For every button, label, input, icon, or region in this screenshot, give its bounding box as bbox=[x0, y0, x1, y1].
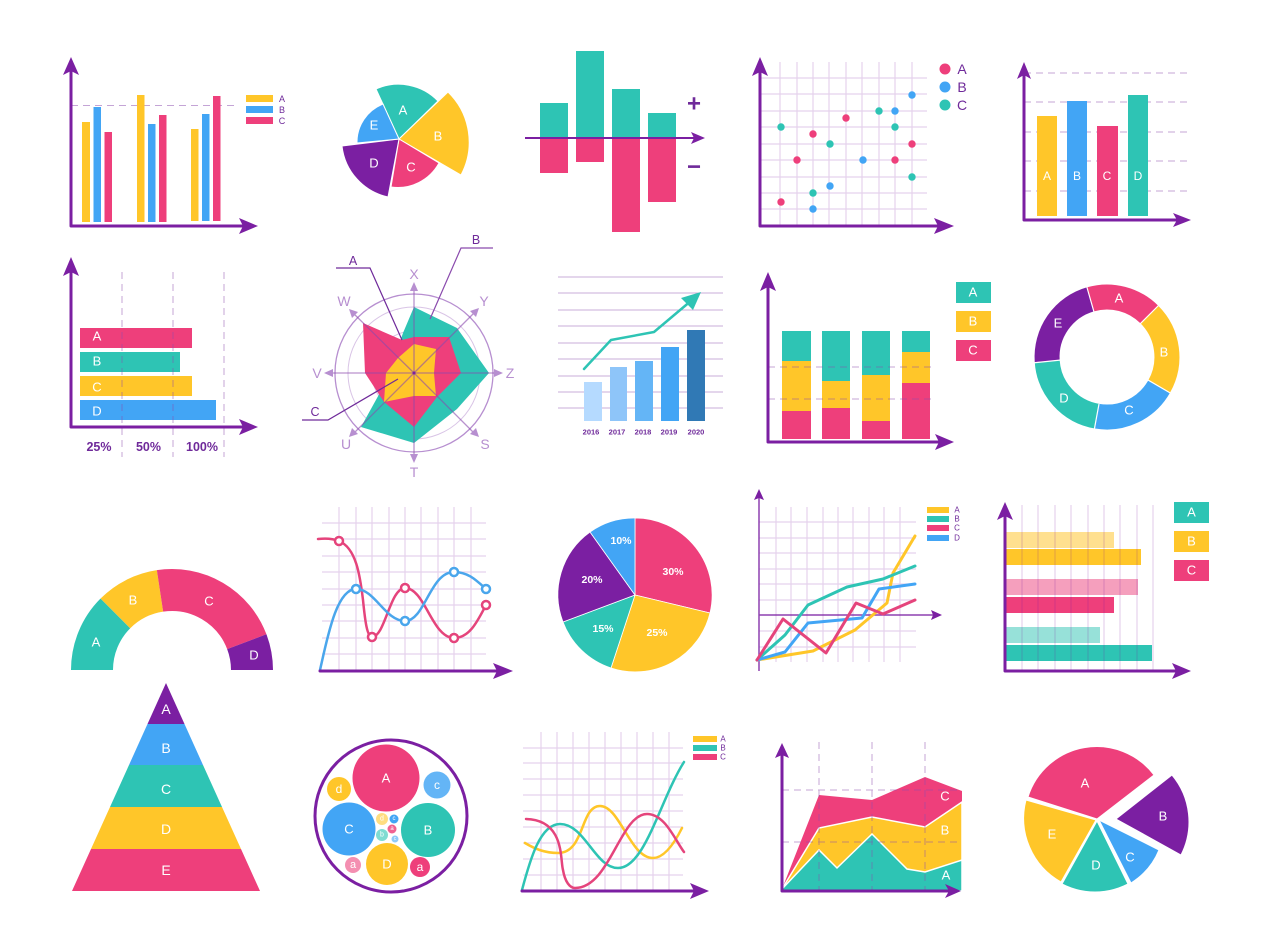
percent labels bbox=[86, 440, 218, 454]
panel: positive and negative bars bbox=[525, 51, 705, 232]
panel: exploded pie chart: B bbox=[1159, 808, 1167, 824]
year labels bbox=[583, 428, 704, 436]
panel: donut chart bbox=[1032, 284, 1172, 431]
panel: polar area chart: E bbox=[370, 118, 379, 132]
axis letters: X bbox=[409, 266, 419, 282]
axes bbox=[760, 272, 954, 450]
columns: B bbox=[1073, 169, 1081, 183]
panel: half donut chart: A bbox=[92, 634, 101, 650]
panel: bubble chart: b bbox=[380, 832, 384, 838]
legend: A bbox=[957, 61, 967, 77]
panel: radar chart bbox=[302, 233, 515, 480]
legend bbox=[693, 734, 726, 762]
legend: B bbox=[1187, 534, 1196, 548]
x axis bbox=[320, 663, 513, 679]
panel: pyramid chart: A bbox=[161, 701, 171, 717]
radar spokes bbox=[324, 282, 503, 463]
panel: pyramid chart bbox=[72, 683, 260, 891]
panel: bubble chart: a bbox=[350, 859, 357, 871]
year labels: 2017 bbox=[609, 428, 625, 436]
axes bbox=[775, 743, 961, 898]
legend: A bbox=[279, 94, 285, 104]
panel: bubble chart: c bbox=[394, 836, 397, 842]
year labels: 2019 bbox=[661, 428, 677, 436]
axis letters: Y bbox=[479, 293, 489, 309]
callout leaders: C bbox=[310, 405, 320, 419]
panel: polar area chart: D bbox=[369, 156, 379, 170]
radar series A bbox=[363, 323, 461, 427]
columns: C bbox=[1103, 169, 1112, 183]
yearly bars bbox=[584, 330, 705, 421]
percent labels: 50% bbox=[136, 440, 161, 454]
legend bbox=[940, 61, 967, 113]
zero axis arrow bbox=[525, 132, 705, 144]
panel: half donut chart: B bbox=[129, 592, 137, 608]
panel: polar area chart bbox=[342, 84, 469, 197]
legend: C bbox=[279, 116, 286, 126]
axes bbox=[1017, 62, 1191, 227]
panel: pie chart: 30% bbox=[662, 566, 684, 578]
bars: grouped bbox=[82, 95, 220, 222]
panel: stacked area chart: B bbox=[941, 822, 949, 838]
pink line bbox=[318, 539, 486, 638]
percent labels: 25% bbox=[86, 440, 112, 454]
panel: stacked column chart bbox=[760, 272, 991, 450]
markers bbox=[335, 537, 490, 642]
legend: D bbox=[954, 534, 960, 542]
legend bbox=[956, 282, 991, 361]
axis letters: W bbox=[337, 293, 351, 309]
panel: column chart with dashed levels bbox=[1017, 62, 1191, 227]
blue line bbox=[320, 572, 486, 670]
panel: pyramid chart: E bbox=[161, 862, 171, 878]
panel: horizontal percent bars: C bbox=[92, 380, 102, 394]
axes bbox=[997, 502, 1191, 679]
trend arrow bbox=[584, 292, 701, 369]
axis letters: V bbox=[312, 365, 322, 381]
panel: bubble chart bbox=[315, 740, 467, 892]
axis letters: T bbox=[410, 464, 419, 480]
panel: polar area chart: B bbox=[434, 128, 442, 144]
panel: smooth three-series line chart bbox=[522, 732, 726, 899]
axis letters: Z bbox=[506, 365, 515, 381]
panel: bubble chart: a bbox=[390, 826, 394, 832]
panel: donut chart: B bbox=[1160, 344, 1168, 360]
panel: bubble chart: C bbox=[344, 822, 354, 836]
curves bbox=[522, 762, 684, 890]
callout leaders bbox=[302, 233, 493, 420]
panel: growth chart bbox=[558, 277, 723, 436]
axes bbox=[754, 489, 942, 671]
panel: horizontal percent bars: D bbox=[92, 404, 102, 418]
panel: pyramid chart: B bbox=[161, 740, 171, 756]
panel: pie chart bbox=[558, 518, 712, 672]
panel: half donut chart: D bbox=[249, 648, 259, 662]
stacked columns bbox=[782, 331, 930, 439]
panel: smooth line chart with markers bbox=[318, 507, 513, 679]
panel: bubble chart: c bbox=[434, 778, 440, 792]
legend: B bbox=[954, 514, 960, 524]
axes bbox=[63, 57, 258, 234]
axis letters: U bbox=[341, 436, 351, 452]
panel: pyramid chart: C bbox=[161, 781, 171, 797]
axis letters: S bbox=[480, 436, 490, 452]
panel: bubble chart: c bbox=[392, 816, 396, 822]
panel: multi-series line chart bbox=[754, 489, 960, 671]
axes bbox=[63, 257, 258, 435]
legend: C bbox=[968, 342, 978, 358]
legend bbox=[1174, 502, 1209, 581]
panel: polar area chart: A bbox=[399, 102, 408, 118]
legend: A bbox=[969, 284, 978, 300]
panel: stacked area chart: A bbox=[942, 868, 951, 882]
panel: pie chart: 15% bbox=[592, 623, 614, 635]
panel: exploded pie chart: C bbox=[1125, 850, 1135, 864]
radar series B bbox=[361, 307, 489, 443]
panel: scatter plot bbox=[752, 57, 967, 234]
callout leaders: B bbox=[472, 233, 480, 247]
panel: horizontal percent bars: B bbox=[93, 354, 101, 368]
year labels: 2018 bbox=[635, 428, 651, 436]
panel: pie chart: 25% bbox=[646, 627, 668, 639]
panel: bubble chart: a bbox=[417, 860, 424, 874]
legend bbox=[927, 506, 960, 542]
panel: polar area chart: C bbox=[406, 160, 416, 174]
legend: B bbox=[957, 79, 967, 95]
radar series C bbox=[384, 344, 436, 402]
legend: C bbox=[957, 97, 967, 113]
legend bbox=[246, 94, 286, 126]
legend: B bbox=[720, 744, 726, 752]
year labels: 2016 bbox=[583, 428, 599, 436]
legend: C bbox=[1187, 562, 1196, 578]
panel: bubble chart: B bbox=[424, 822, 432, 838]
columns: A bbox=[1043, 169, 1051, 183]
legend: C bbox=[954, 524, 960, 532]
series lines bbox=[757, 536, 915, 660]
panel: half donut chart: C bbox=[204, 594, 214, 608]
panel: horizontal percent bars: A bbox=[93, 328, 102, 344]
columns bbox=[1037, 95, 1148, 216]
panel: pie chart: 10% bbox=[610, 535, 632, 547]
panel: exploded pie chart: A bbox=[1081, 776, 1090, 790]
panel: exploded pie chart bbox=[1024, 747, 1189, 892]
panel: paired horizontal bars bbox=[997, 502, 1209, 679]
plus and minus signs: − bbox=[687, 154, 701, 180]
panel: exploded pie chart: E bbox=[1048, 826, 1057, 842]
panel: bubble chart: A bbox=[382, 770, 391, 786]
percent labels: 100% bbox=[186, 440, 218, 454]
plus and minus signs: + bbox=[687, 90, 701, 118]
panel: bubble chart: d bbox=[336, 782, 342, 796]
panel: stacked area chart: C bbox=[940, 788, 950, 804]
legend: B bbox=[279, 105, 285, 115]
panel: donut chart: C bbox=[1124, 402, 1134, 418]
x axis bbox=[522, 883, 709, 899]
legend: A bbox=[1187, 504, 1196, 520]
legend: C bbox=[720, 752, 726, 762]
panel: horizontal percent bars bbox=[63, 257, 258, 457]
panel: pyramid chart: D bbox=[161, 821, 171, 837]
panel: bubble chart: D bbox=[382, 856, 392, 872]
panel: donut chart: D bbox=[1059, 390, 1069, 406]
plus and minus signs bbox=[687, 90, 701, 180]
panel: pie chart: 20% bbox=[581, 574, 603, 586]
panel: half donut chart bbox=[92, 590, 259, 670]
panel: donut chart: A bbox=[1115, 290, 1124, 306]
legend: A bbox=[954, 506, 960, 514]
axis letters bbox=[312, 266, 515, 480]
dots bbox=[777, 91, 916, 213]
legend: B bbox=[969, 314, 977, 328]
axes bbox=[752, 57, 954, 234]
year labels: 2020 bbox=[688, 428, 704, 436]
panel: donut chart: E bbox=[1054, 316, 1063, 330]
legend: A bbox=[720, 734, 726, 744]
panel: stacked area chart bbox=[775, 742, 962, 898]
columns: D bbox=[1134, 169, 1143, 183]
panel: exploded pie chart: D bbox=[1091, 858, 1101, 872]
panel: bubble chart: d bbox=[380, 816, 384, 822]
panel: grouped bar chart bbox=[63, 57, 286, 234]
callout leaders: A bbox=[349, 254, 358, 268]
